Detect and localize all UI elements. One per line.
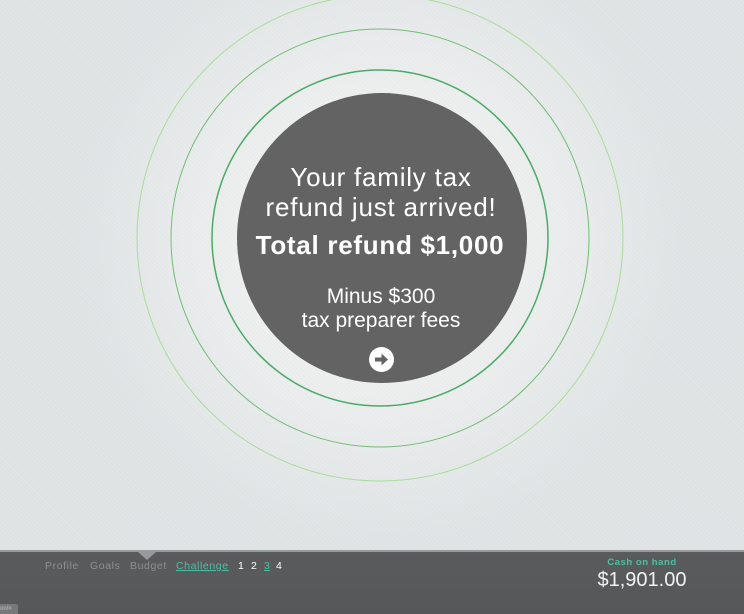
nav: Profile: Profile [45, 560, 79, 572]
footer bar [0, 550, 744, 614]
heading: tax refund message: refund just arrived! [266, 192, 496, 222]
central dark circle [237, 93, 527, 383]
cash on hand amount: $1,901.00 [598, 569, 686, 591]
tax preparer fees text: Minus $300 [327, 285, 435, 308]
heading: tax refund message: Your family tax [290, 162, 472, 192]
nav: Challenge: Challenge [176, 560, 229, 572]
nav: step numbers: 1 [238, 560, 244, 572]
inner ring [212, 70, 548, 406]
nav: Goals: Goals [90, 560, 120, 572]
nav: step numbers: 2 [251, 560, 257, 572]
middle ring [171, 29, 589, 447]
icon: next arrow button [369, 347, 394, 372]
outer ring [137, 0, 623, 481]
nav: Budget: Budget [130, 560, 167, 572]
nav: step numbers: 4 [276, 560, 282, 572]
nav: step numbers: 3 [264, 560, 270, 572]
nav: step numbers [238, 560, 282, 572]
small corner tab [0, 604, 18, 614]
heading: tax refund message [266, 162, 496, 222]
tax preparer fees text [302, 285, 460, 332]
navigation marker triangle [138, 552, 156, 560]
small corner tab: on/# [0, 606, 12, 612]
cash on hand label: Cash on hand [607, 557, 677, 568]
total refund amount: Total refund $1,000 [256, 230, 504, 260]
tax preparer fees text: tax preparer fees [302, 309, 460, 332]
